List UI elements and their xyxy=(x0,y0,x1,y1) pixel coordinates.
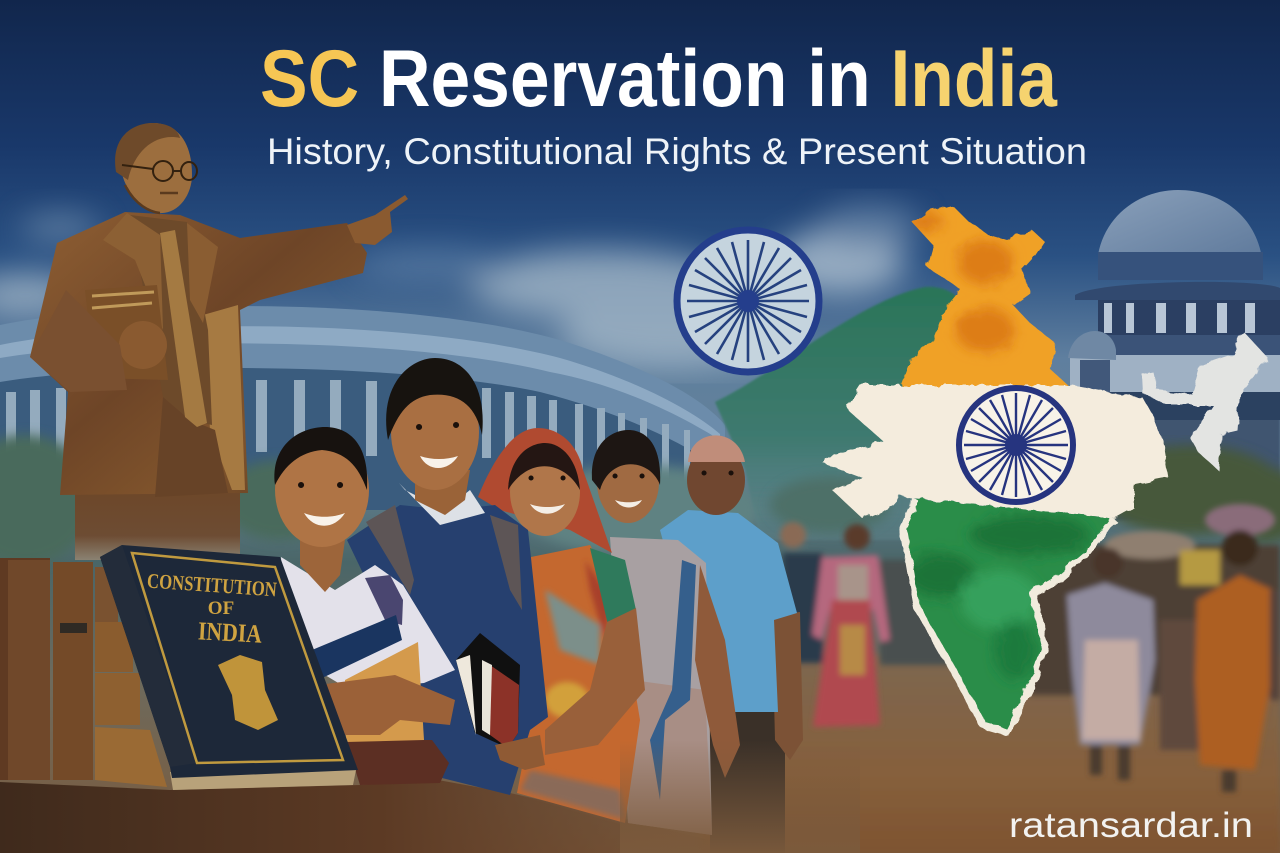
gavel base xyxy=(346,740,449,785)
boy hand on book xyxy=(495,735,545,770)
woman in grey dress xyxy=(592,430,740,835)
book title india: INDIA xyxy=(197,616,263,649)
book cover xyxy=(100,545,358,778)
small chakra emblem in sky xyxy=(677,230,819,372)
supreme court building xyxy=(1060,190,1280,520)
boy in white shirt xyxy=(274,427,455,742)
wooden table xyxy=(0,780,760,853)
statue trousers through opening xyxy=(155,397,228,497)
woman dress xyxy=(610,537,712,835)
constitution of India book xyxy=(100,545,358,790)
statue mouth and shading xyxy=(125,185,178,213)
national emblem xyxy=(218,655,278,730)
map: ashoka chakra xyxy=(959,388,1073,502)
saree pattern xyxy=(520,560,625,820)
ground xyxy=(700,655,1280,853)
woman arm xyxy=(695,565,740,778)
statue jacket xyxy=(30,212,367,495)
books held by tall boy xyxy=(456,633,520,748)
collar xyxy=(399,483,485,525)
statue forearm xyxy=(30,290,127,392)
man in blue polo xyxy=(660,435,803,853)
backpack strap right xyxy=(490,515,522,610)
man eyes xyxy=(704,470,731,476)
statue legs xyxy=(75,490,240,560)
woman smile xyxy=(530,504,565,514)
head xyxy=(391,374,479,490)
statue left lapel xyxy=(103,213,163,330)
map: saffron north xyxy=(900,206,1070,387)
boy forearms xyxy=(318,675,455,735)
bare arm xyxy=(545,608,645,755)
man trousers xyxy=(710,710,785,853)
man cap xyxy=(688,435,745,462)
boy hair xyxy=(274,427,367,490)
woman smile xyxy=(615,500,642,508)
statue jacket highlight xyxy=(203,305,245,490)
subtitle: History, Constitutional Rights & Present Situation xyxy=(267,131,1087,172)
woman eyes xyxy=(531,476,563,480)
woman face xyxy=(510,448,580,536)
dress lower xyxy=(628,680,712,835)
sweater xyxy=(347,505,548,795)
woman in saree xyxy=(478,428,645,823)
statue of Dr. Ambedkar xyxy=(30,123,408,560)
statue hand on book xyxy=(119,321,167,369)
backpack strap left xyxy=(366,505,414,595)
trees behind people xyxy=(0,435,760,565)
boy eyes xyxy=(301,482,340,488)
walking woman xyxy=(812,524,890,727)
book title of: OF xyxy=(208,598,234,619)
title: SC Reservation in India xyxy=(260,34,1058,124)
head scarf xyxy=(478,428,612,553)
parliament building xyxy=(0,306,725,510)
man shirt xyxy=(660,510,797,712)
woman face details xyxy=(615,474,642,478)
orange book xyxy=(345,642,424,742)
white shirt xyxy=(281,557,455,690)
neck xyxy=(415,470,470,515)
book spine xyxy=(100,545,197,767)
boy smile xyxy=(304,513,345,526)
gold frame xyxy=(132,553,343,763)
saree body xyxy=(517,545,640,823)
statue held book xyxy=(85,285,168,380)
statue glasses xyxy=(122,161,197,181)
background crowd xyxy=(780,504,1280,792)
boy neck xyxy=(300,540,345,592)
statue waistcoat xyxy=(130,215,212,425)
tall boy in navy sweater xyxy=(347,358,548,795)
smile xyxy=(420,456,458,468)
statue hair xyxy=(115,123,180,180)
green blouse xyxy=(590,548,636,625)
woman blue scarf xyxy=(650,560,696,800)
eyes xyxy=(419,425,456,427)
statue book lines xyxy=(92,292,154,308)
book pages xyxy=(170,770,356,790)
man head xyxy=(687,445,745,515)
foreground fade xyxy=(620,740,860,853)
book title: CONSTITUTION xyxy=(146,568,278,602)
woman hair xyxy=(592,430,660,490)
map: green south xyxy=(903,499,1113,732)
India map flag xyxy=(823,206,1268,732)
statue pointing hand xyxy=(347,195,408,245)
hair xyxy=(386,358,483,440)
woman head xyxy=(597,441,659,523)
map: white centre xyxy=(823,385,1168,519)
trees right xyxy=(770,445,1280,543)
clouds xyxy=(0,205,920,367)
man arm xyxy=(772,612,803,760)
orange walking person xyxy=(1195,530,1280,792)
boy head xyxy=(275,433,369,547)
statue head xyxy=(120,123,192,213)
statue tie xyxy=(160,230,207,427)
woman hair parting xyxy=(508,443,580,490)
navy book xyxy=(312,615,402,680)
map: north-east region xyxy=(1142,331,1268,470)
website watermark: ratansardar.in xyxy=(1009,806,1253,845)
statue right lapel xyxy=(187,223,218,323)
backpack strap xyxy=(365,575,403,625)
pale walking person xyxy=(1067,548,1155,780)
old books stack xyxy=(0,558,167,787)
map: rough coloured regions xyxy=(823,206,1268,732)
green flag wave xyxy=(715,287,960,540)
